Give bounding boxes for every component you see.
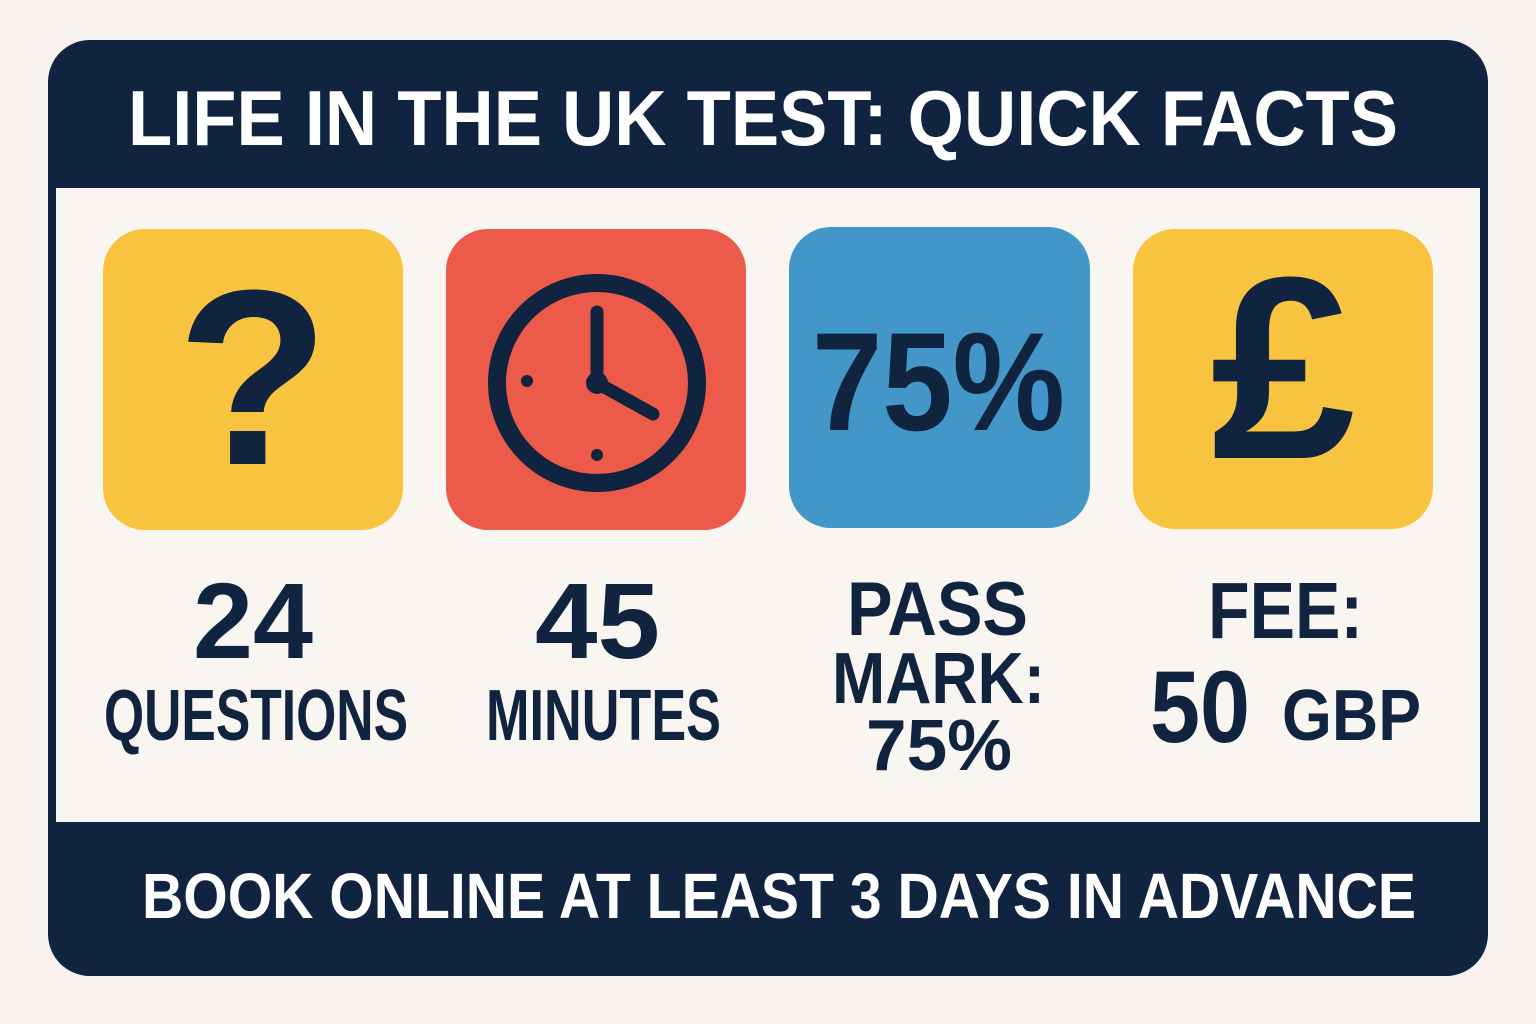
fact: fee: 50 [1150,650,1250,764]
tile: questions icon [103,229,403,530]
tile: questions icon: ? [177,238,329,517]
fact: pass mark: MARK: [832,639,1045,719]
tile: pound icon: £ [1211,224,1355,514]
fact: 45 minutes: MINUTES [486,676,721,756]
footer text: BOOK ONLINE AT LEAST 3 DAYS IN ADVANCE [142,860,1416,932]
inner panel [56,188,1480,822]
tile: clock icon [446,229,746,530]
tile: 75% icon [789,227,1090,528]
fact: 24 questions [104,560,408,756]
fact: pass mark: PASS [847,567,1028,652]
fact: 45 minutes: 45 [535,560,660,681]
fact: fee: FEE: [1208,566,1363,655]
fact: 24 questions: QUESTIONS [104,676,408,756]
tile: 75% icon: 75% [812,303,1065,460]
fact: 24 questions: 24 [193,560,313,681]
tile: pound icon [1133,224,1433,529]
fact: 45 minutes [486,560,721,756]
title: LIFE IN THE UK TEST: QUICK FACTS [128,74,1398,162]
fact: fee: GBP [1282,676,1421,756]
fact: fee [1150,566,1421,764]
fact: pass mark: 75% [866,706,1012,786]
fact: pass mark [832,567,1045,786]
